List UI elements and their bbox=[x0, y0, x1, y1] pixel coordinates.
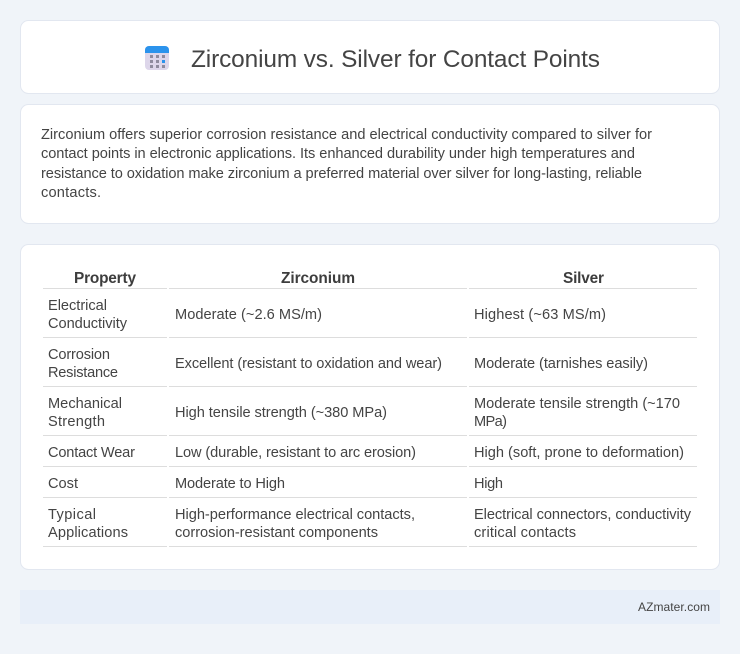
row: cost bbox=[43, 476, 697, 498]
row: mechanical strength: Moderate tensile strength (~170 bbox=[474, 396, 680, 412]
row: typical applications: High-performance electrical contacts, bbox=[175, 507, 415, 523]
row: corrosion resistance: Excellent (resistant to oxidation and wear) bbox=[175, 356, 442, 372]
row: corrosion resistance: Moderate (tarnishes easily) bbox=[474, 356, 648, 372]
row: mechanical strength: Strength bbox=[48, 414, 105, 430]
row: contact wear: Contact Wear bbox=[48, 445, 135, 461]
row: contact wear bbox=[43, 445, 697, 467]
panel: title card bbox=[20, 20, 720, 94]
icon: calendar grid bbox=[145, 46, 169, 70]
table header: Property bbox=[74, 270, 136, 287]
row: cost: Cost bbox=[48, 476, 78, 492]
row: corrosion resistance: Corrosion bbox=[48, 347, 110, 363]
row: typical applications: Electrical connectors, conductivity bbox=[474, 507, 692, 523]
row: corrosion resistance bbox=[43, 347, 697, 387]
footer credit: AZmater.com bbox=[638, 600, 710, 614]
title: Zirconium vs. Silver for Contact Points bbox=[191, 46, 600, 73]
row: contact wear: High (soft, prone to deformation) bbox=[474, 445, 684, 461]
row: cost: High bbox=[474, 476, 503, 492]
row: mechanical strength: Mechanical bbox=[48, 396, 122, 412]
summary paragraph: contacts. bbox=[41, 185, 101, 201]
row: mechanical strength: MPa) bbox=[474, 414, 507, 430]
row: contact wear: Low (durable, resistant to arc erosion) bbox=[175, 445, 416, 461]
row: typical applications: critical contacts bbox=[474, 525, 576, 541]
table header bbox=[43, 270, 697, 289]
summary paragraph: Zirconium offers superior corrosion resistance and electrical conductivity compared to silver for bbox=[41, 127, 652, 143]
row: electrical conductivity: Highest (~63 MS/m) bbox=[474, 307, 606, 323]
row: electrical conductivity bbox=[43, 298, 697, 338]
panel: summary bbox=[20, 104, 720, 224]
row: typical applications: corrosion-resistant components bbox=[175, 525, 378, 541]
table header: Silver bbox=[563, 270, 604, 287]
row: typical applications bbox=[43, 507, 697, 547]
row: cost: Moderate to High bbox=[175, 476, 285, 492]
footer bar bbox=[20, 590, 720, 624]
row: corrosion resistance: Resistance bbox=[48, 365, 118, 381]
row: electrical conductivity: Electrical bbox=[48, 298, 107, 314]
summary paragraph bbox=[41, 127, 652, 201]
row: mechanical strength bbox=[43, 396, 697, 436]
table header: Zirconium bbox=[281, 270, 355, 287]
summary paragraph: resistance to oxidation make zirconium a preferred material over silver for long-lasting, reliable bbox=[41, 166, 642, 182]
row: electrical conductivity: Moderate (~2.6 MS/m) bbox=[175, 307, 322, 323]
row: electrical conductivity: Conductivity bbox=[48, 316, 128, 332]
row: mechanical strength: High tensile strength (~380 MPa) bbox=[175, 405, 387, 421]
panel: comparison table bbox=[20, 244, 720, 570]
row: typical applications: Applications bbox=[48, 525, 128, 541]
row: typical applications: Typical bbox=[48, 507, 96, 523]
summary paragraph: contact points in electronic applications. Its enhanced durability under high temperatures and bbox=[41, 146, 635, 162]
